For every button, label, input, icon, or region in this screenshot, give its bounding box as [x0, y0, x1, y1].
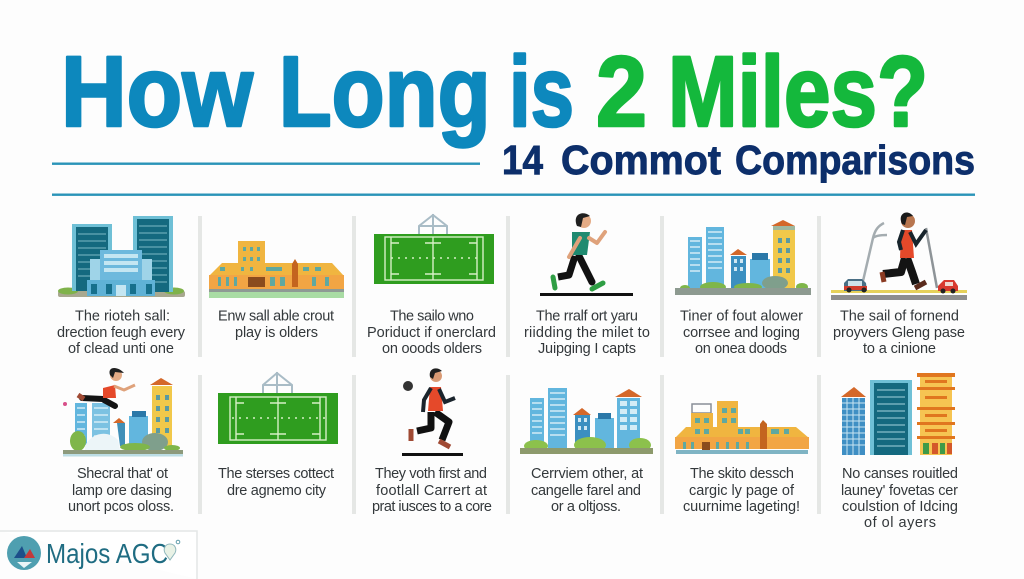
caption 11: cuurnime lageting! — [683, 499, 800, 515]
caption 4: Juipging I capts — [538, 341, 636, 357]
caption 6: to a cinione — [863, 341, 936, 357]
caption 7 — [68, 466, 174, 515]
logo — [0, 531, 197, 579]
panel: card 5 — [675, 220, 811, 357]
title: Long — [279, 36, 491, 148]
caption 9 — [372, 466, 492, 515]
subtitle: Commot — [561, 137, 721, 183]
caption 5 — [680, 308, 803, 357]
icon: football runner — [402, 368, 463, 456]
caption 6: The sail of fornend — [840, 308, 959, 324]
panel: card 11 — [675, 401, 809, 515]
caption 12 — [841, 466, 958, 531]
caption 9: They voth first and — [375, 466, 487, 482]
caption 3: on ooods olders — [382, 341, 482, 357]
caption 8: dre agnemo city — [227, 483, 327, 499]
caption 9: footlall Carrert at — [376, 483, 487, 499]
caption 3: Poriduct if onerclard — [367, 325, 496, 341]
caption 12: No canses rouitled — [842, 466, 958, 482]
icon: campus building — [209, 241, 344, 298]
title: 2 — [596, 36, 647, 148]
caption 10 — [531, 466, 643, 515]
caption 4: riidding the milet to — [524, 325, 650, 341]
icon: office towers — [58, 216, 185, 297]
caption 1 — [57, 308, 186, 357]
panel: card 7 — [63, 368, 183, 515]
icon: walker with pole and cars — [831, 213, 967, 300]
panel: card 10 — [520, 388, 653, 515]
subtitle: 14 — [502, 137, 543, 183]
logo: Majos AGC — [46, 538, 168, 569]
caption 5: corrsee and loging — [683, 325, 800, 341]
panel: card 1 — [57, 216, 186, 357]
caption 4 — [524, 308, 650, 357]
caption 11: cargic ly page of — [689, 483, 795, 499]
caption 2: Enw sall able crout — [218, 308, 334, 324]
title: Miles? — [668, 36, 928, 148]
icon: sports field — [374, 214, 494, 284]
caption 2: play is olders — [235, 325, 318, 341]
caption 10: Cerrviem other, at — [531, 466, 643, 482]
caption 7: unort pcos oloss. — [68, 499, 174, 515]
icon: campus building — [675, 401, 809, 454]
title: is — [509, 36, 574, 148]
caption 6: proyvers Gleng pase — [833, 325, 965, 341]
title — [61, 36, 928, 148]
icon: sports field — [218, 372, 338, 444]
caption 8 — [218, 466, 334, 499]
caption 2 — [218, 308, 334, 341]
icon: city skyline — [675, 220, 811, 295]
panel: card 2 — [209, 241, 344, 341]
panel: card 12 — [841, 373, 958, 531]
caption 7: lamp ore dasing — [72, 483, 172, 499]
caption 10: or a oltjoss. — [551, 499, 621, 515]
caption 6 — [833, 308, 965, 357]
panel: card 8 — [218, 372, 338, 499]
panel: card 6 — [831, 213, 967, 357]
caption 3 — [367, 308, 496, 357]
caption 7: Shecral that' ot — [77, 466, 168, 482]
caption 12: launey' fovetas cer — [841, 483, 958, 499]
icon: runner — [540, 213, 633, 296]
caption 4: The rralf ort yaru — [536, 308, 638, 324]
panel: card 3 — [367, 214, 496, 357]
caption 1: of clead unti one — [68, 341, 174, 357]
caption 11 — [683, 466, 800, 515]
icon: logo badge — [7, 536, 41, 570]
caption 3: The sailo wno — [390, 308, 474, 324]
caption 11: The skito dessch — [690, 466, 794, 482]
caption 12: coulstion of Idcing — [842, 499, 958, 515]
subtitle — [502, 137, 975, 183]
panel: card 9 — [372, 368, 492, 515]
subtitle: Comparisons — [735, 137, 975, 183]
caption 1: The rioteh sall: — [75, 308, 170, 324]
caption 5: on onea doods — [695, 341, 787, 357]
caption 9: prat iusces to a core — [372, 499, 492, 515]
title: How — [61, 36, 253, 148]
caption 5: Tiner of fout alower — [680, 308, 803, 324]
caption 1: drection feugh every — [57, 325, 186, 341]
panel: card 4 — [524, 213, 650, 357]
icon: blue skyline — [520, 388, 653, 454]
caption 8: The sterses cottect — [218, 466, 334, 482]
caption 10: cangelle farel and — [531, 483, 641, 499]
caption 12: of ol ayers — [864, 515, 936, 531]
icon: jumper over city — [63, 368, 183, 456]
icon: three high-rises — [841, 373, 955, 455]
